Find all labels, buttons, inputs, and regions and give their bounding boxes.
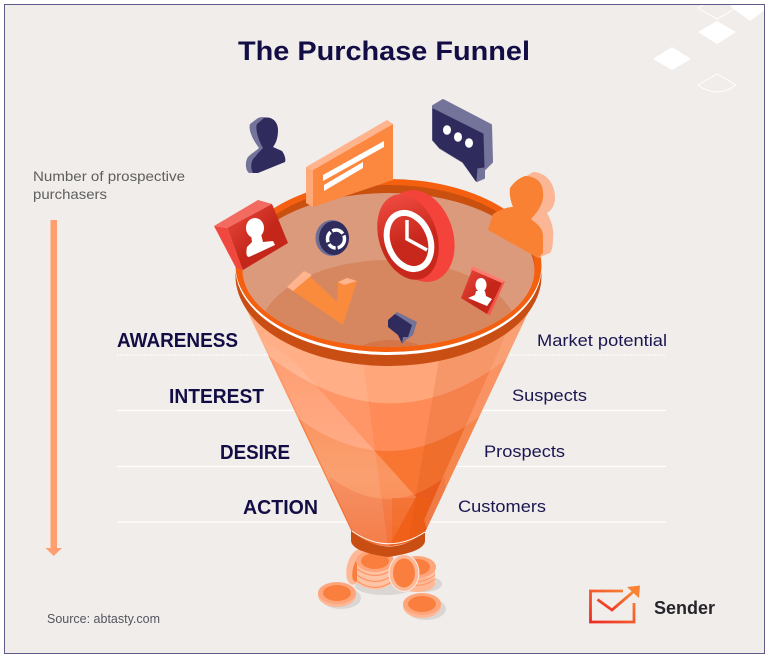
funnel collar	[351, 531, 425, 557]
stage labels: ACTION	[243, 497, 318, 519]
axis label: number of prospective purchasers: Number of prospective	[33, 168, 185, 184]
title: The Purchase Funnel	[238, 36, 530, 66]
funnel body	[246, 309, 528, 546]
icon: red profile card	[214, 200, 288, 270]
icon: check mark	[287, 271, 357, 325]
icon: clock	[367, 181, 466, 291]
icon: orange person	[488, 172, 555, 258]
stage labels: DESIRE	[220, 442, 290, 464]
icon: message card	[306, 120, 393, 207]
Sender logo: Sender	[654, 597, 715, 618]
stage labels: AWARENESS	[117, 330, 238, 352]
icon: donut chart	[316, 220, 349, 256]
coins	[318, 547, 446, 620]
audience labels: Market potential	[537, 331, 667, 350]
audience labels: Customers	[458, 497, 546, 516]
arrow: downward	[46, 220, 62, 556]
source note: Source: abtasty.com	[47, 612, 160, 626]
Sender logo	[590, 586, 715, 622]
audience labels: Suspects	[512, 386, 587, 405]
decorative diamonds	[653, 0, 769, 92]
icon: speech bubble	[433, 100, 492, 181]
stage labels: INTEREST	[169, 386, 264, 408]
funnel rim and interior	[236, 179, 542, 366]
axis label: number of prospective purchasers	[33, 168, 185, 202]
icon: small speech bubble	[388, 312, 417, 344]
icon: navy person	[246, 117, 285, 173]
stage labels	[117, 330, 318, 519]
audience labels	[458, 331, 667, 516]
stage divider lines	[117, 355, 666, 522]
icon: small red profile card	[461, 266, 505, 315]
audience labels: Prospects	[484, 442, 565, 461]
axis label: number of prospective purchasers: purchasers	[33, 186, 107, 202]
